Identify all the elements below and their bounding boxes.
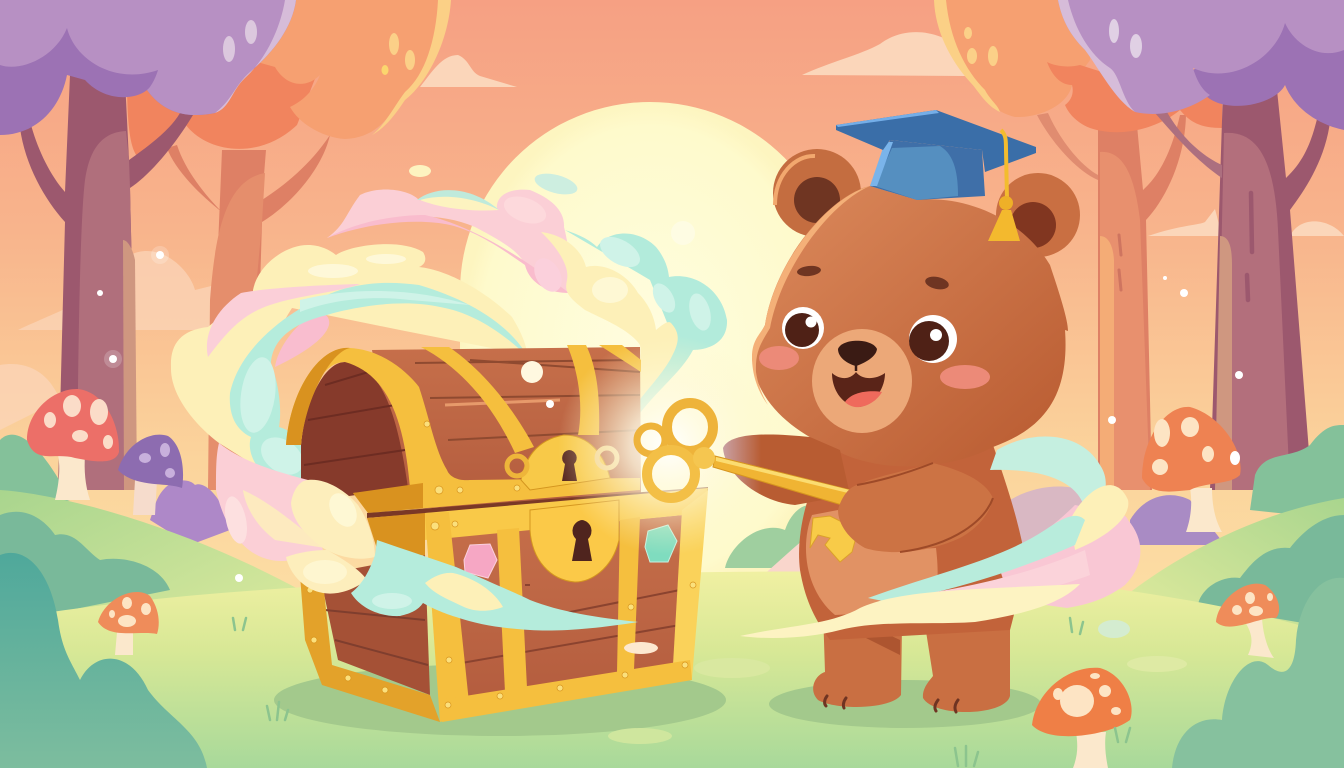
grass tufts: [233, 618, 1130, 766]
nose: [838, 341, 877, 366]
yellow ribbon tip: [1070, 485, 1128, 550]
yellow drop: [291, 480, 375, 559]
teal lower ribbon: [351, 540, 638, 631]
ground meadow: [0, 572, 1344, 768]
teal main ribbon: [230, 283, 528, 482]
foreground bushes: [0, 553, 1344, 768]
yellow lower: [286, 550, 367, 594]
treasure chest: [286, 345, 708, 722]
tree: left orange: [127, 0, 451, 490]
muzzle: [812, 329, 912, 433]
hills and background bushes: [0, 425, 1344, 640]
key glow: [558, 335, 778, 555]
tree: left purple: [0, 0, 296, 490]
lid wood: [372, 347, 641, 510]
key head: [637, 403, 715, 498]
base left wood: [320, 555, 430, 695]
pink blob right: [995, 505, 1140, 608]
top pink ribbon: [327, 190, 570, 293]
eyes: [782, 307, 824, 349]
yellow right swirl: [541, 232, 678, 420]
pink oval on pink: [529, 253, 567, 297]
teal band: [868, 516, 1085, 602]
swirl in front of chest: [216, 443, 638, 631]
pink band: [207, 284, 360, 357]
mushroom: purple left: [118, 435, 183, 515]
lower lock plate: [530, 500, 619, 582]
yellow left swirl: [171, 295, 301, 470]
pink band: [935, 550, 1090, 601]
bear head: [752, 186, 1068, 466]
ribbon around bear: [740, 436, 1140, 638]
belly: [806, 510, 938, 615]
lid straps: [421, 347, 534, 453]
key shaft: [713, 456, 850, 505]
mushroom: orange right: [1142, 407, 1241, 532]
upper lock plate: [521, 435, 610, 490]
yellow ribbon: [740, 584, 1080, 638]
sparkles: [97, 221, 1243, 582]
mushroom: front right: [1032, 668, 1132, 768]
seam: [367, 487, 708, 518]
sun: [460, 102, 840, 600]
lid arch trim: [286, 348, 640, 513]
tree: right purple: [1058, 0, 1344, 490]
mushroom: small left: [98, 592, 159, 655]
ground shadows and patches: [274, 620, 1187, 744]
lid interior: [301, 362, 408, 505]
key bit: [810, 516, 858, 562]
bear ears: [773, 149, 1080, 257]
gems: [464, 544, 497, 578]
arm left: [723, 434, 850, 505]
lower pink: [216, 443, 323, 561]
swirl behind chest: [171, 165, 727, 482]
brows: [797, 265, 821, 277]
pink inner: [275, 313, 329, 367]
rivets: [307, 421, 696, 708]
bear legs: [813, 610, 902, 707]
tree: right orange: [934, 0, 1222, 490]
base right wood: [440, 513, 704, 708]
teal right swirl: [565, 230, 727, 425]
mushroom: small right: [1216, 584, 1279, 658]
yellow cloud: [253, 244, 527, 355]
teal arc: [990, 436, 1106, 510]
mushroom: red left: [27, 389, 119, 500]
mushrooms: [27, 389, 1279, 768]
base gold frame: [367, 513, 425, 558]
hand arm: [838, 463, 993, 552]
bear torso: [799, 445, 1023, 640]
clouds: [0, 32, 1344, 430]
bear: [637, 110, 1080, 712]
graduation cap: [836, 110, 1036, 241]
cheeks: [759, 346, 799, 370]
mouth: [832, 372, 885, 407]
